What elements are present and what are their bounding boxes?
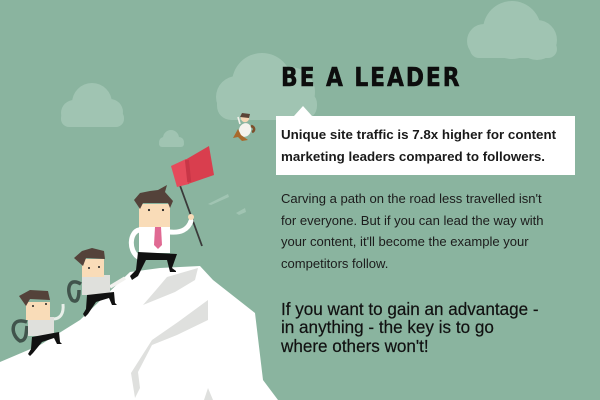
title: BE A LEADER [281,63,462,93]
body paragraph: for everyone. But if you can lead the way with [281,213,544,228]
body paragraph: Carving a path on the road less travelled isn't [281,191,542,206]
follower lower [13,290,63,356]
cloud: top right [467,1,557,60]
body paragraph [281,191,544,271]
body paragraph: your content, it'll become the example your [281,234,529,249]
stat text: marketing leaders compared to followers. [281,148,545,164]
cloud: left [61,83,124,127]
closing statement: in anything - the key is to go [281,318,494,337]
follower middle [69,248,125,317]
mountain shadows [131,268,213,400]
wind streaks [208,194,246,215]
cloud: small [159,130,184,147]
closing statement [280,300,539,356]
stat text [281,127,556,164]
leader figure [130,185,194,280]
stat text: Unique site traffic is 7.8x higher for content [281,127,556,142]
mountain [0,266,278,400]
flag [171,146,214,246]
closing statement: If you want to gain an advantage - [281,300,539,319]
stat box [276,116,575,175]
cloud: behind heading [216,53,317,120]
flying figure on wind-up key [233,113,254,141]
callout pointer [294,106,312,116]
body paragraph: competitors follow. [281,256,388,271]
closing statement: where others won't! [281,337,429,356]
